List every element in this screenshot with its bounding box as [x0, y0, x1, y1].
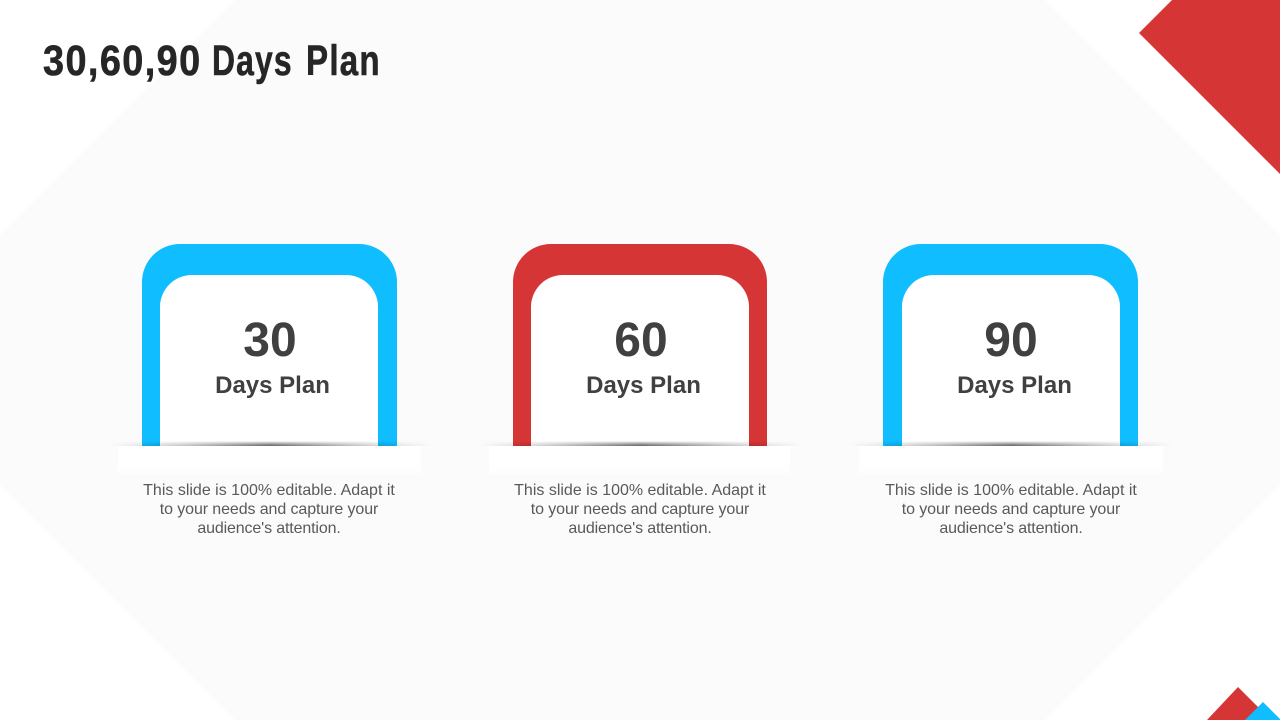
white strip [118, 446, 421, 474]
panel: 90 days plan [862, 244, 1160, 537]
description: audience's attention. [568, 520, 712, 537]
blue frame [142, 244, 397, 446]
shadow line [479, 441, 803, 446]
icon: corner triangles bottom right [1207, 687, 1280, 720]
description: audience's attention. [939, 520, 1083, 537]
description: to your needs and capture your [160, 501, 378, 518]
white inner card [902, 275, 1120, 446]
white inner card [531, 275, 749, 446]
white strip [859, 446, 1163, 474]
title: Plan [306, 37, 381, 85]
description: to your needs and capture your [531, 501, 749, 518]
title: Days [212, 37, 292, 85]
description: audience's attention. [197, 520, 341, 537]
description: This slide is 100% editable. Adapt it [885, 482, 1137, 499]
description [885, 482, 1137, 537]
number: 60 [614, 314, 668, 367]
number: 90 [984, 314, 1038, 367]
panel: 60 days plan [492, 244, 790, 537]
label: Days Plan [586, 372, 701, 399]
description: This slide is 100% editable. Adapt it [143, 482, 395, 499]
title: 30,60,90 [42, 37, 201, 85]
white strip [489, 446, 790, 474]
white inner card [160, 275, 378, 446]
label: Days Plan [215, 372, 330, 399]
panel: 30 days plan [120, 244, 420, 537]
description [143, 482, 395, 537]
description [514, 482, 766, 537]
number: 30 [243, 314, 297, 367]
red frame [513, 244, 767, 446]
icon: red corner diamond top right [1139, 0, 1280, 174]
label: Days Plan [957, 372, 1072, 399]
title [42, 37, 381, 85]
description: to your needs and capture your [902, 501, 1120, 518]
description: This slide is 100% editable. Adapt it [514, 482, 766, 499]
blue frame [883, 244, 1138, 446]
shadow line [108, 441, 432, 446]
shadow line [849, 441, 1173, 446]
